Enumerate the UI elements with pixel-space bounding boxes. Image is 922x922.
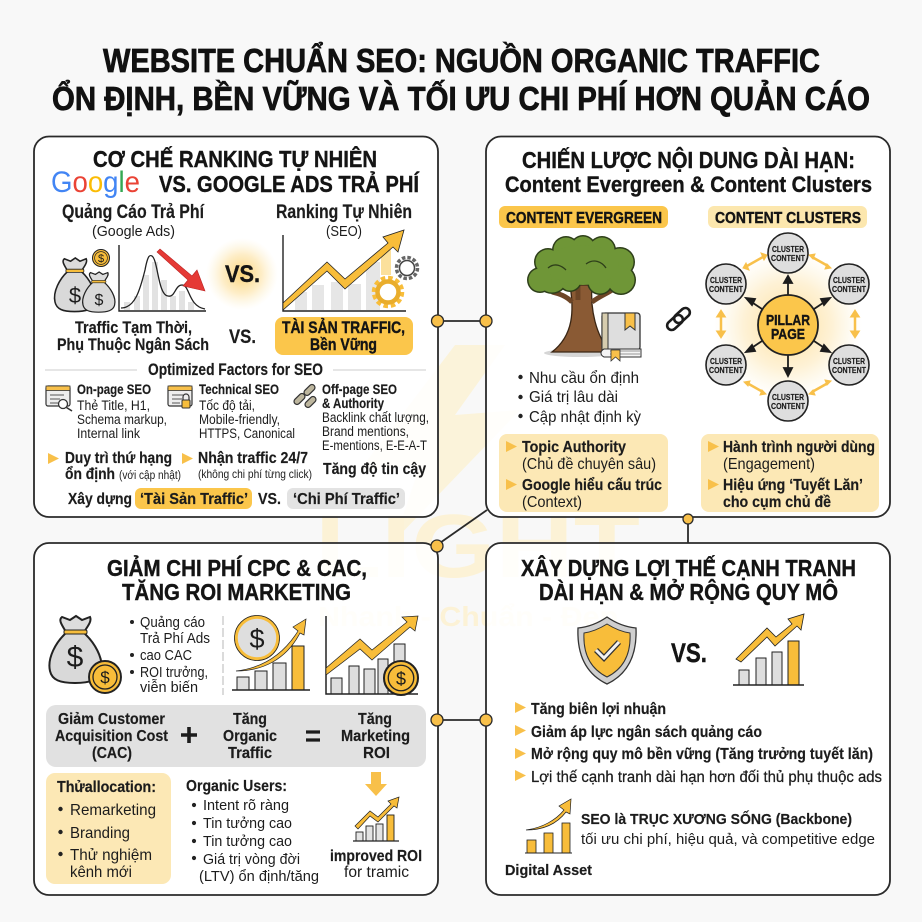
icon: shield <box>578 617 636 684</box>
callout: cluster benefits: Hiệu ứng ‘Tuyết Lăn’ <box>723 477 863 494</box>
organic label: (SEO) <box>326 223 362 240</box>
icon: on-page window <box>46 386 72 411</box>
paid ads label <box>62 202 205 240</box>
term: reduce CAC: Acquisition Cost <box>55 728 169 745</box>
subheading: optimized factors: Optimized Factors for SEO <box>148 361 323 379</box>
heading: DÀI HẠN & MỞ RỘNG QUY MÔ <box>539 577 838 605</box>
tag: content evergreen: CONTENT EVERGREEN <box>506 210 662 227</box>
cluster nodes: CONTENT <box>832 284 867 294</box>
organic label: Ranking Tự Nhiên <box>276 202 412 223</box>
list: evergreen traits <box>518 369 641 426</box>
benefit: stable ranking: Duy trì thứ hạng <box>65 450 172 467</box>
callout: evergreen benefits <box>499 434 668 512</box>
VS badge <box>206 238 278 310</box>
text: SEO backbone: tối ưu chi phí, hiệu quả, và competitive edge <box>581 831 875 848</box>
title <box>52 42 870 117</box>
cluster nodes <box>706 233 869 421</box>
heading: CƠ CHẾ RANKING TỰ NHIÊN <box>93 145 377 172</box>
callout: reallocation <box>46 773 171 884</box>
list: paid ads issues: cao CAC <box>140 648 192 664</box>
text: temporary traffic: Traffic Tạm Thời, <box>75 318 192 337</box>
term: marketing ROI <box>341 711 410 762</box>
term: organic traffic: Traffic <box>228 745 272 762</box>
heading <box>107 553 367 605</box>
heading <box>521 554 856 605</box>
term: reduce CAC: Giảm Customer <box>58 711 165 728</box>
callout: reallocation: Branding <box>70 825 130 842</box>
list: evergreen traits: Giá trị lâu dài <box>529 389 618 406</box>
watermark: LIGHT logo: LIGHT <box>315 497 640 597</box>
watermark: LIGHT logo: Nhanh - Chuẩn - Đẹp <box>318 601 618 632</box>
text: improved ROI: for tramic <box>344 864 409 881</box>
list: organic users: Intent rõ ràng <box>203 797 289 814</box>
heading: XÂY DỰNG LỢI THẾ CẠNH TRANH <box>521 554 856 581</box>
list: advantages: Giảm áp lực ngân sách quảng cáo <box>531 724 762 741</box>
term: reduce CAC: (CAC) <box>92 745 132 762</box>
text: technical SEO: Technical SEO <box>199 382 279 397</box>
heading: VS. GOOGLE ADS TRẢ PHÍ <box>159 169 420 197</box>
list: organic users: Tin tưởng cao <box>203 815 292 832</box>
connectors between panels <box>431 315 693 726</box>
summary row <box>68 488 405 509</box>
benefit: traffic 24/7: Nhận traffic 24/7 <box>198 450 308 467</box>
organic label <box>276 202 412 240</box>
callout: reallocation: kênh mới <box>70 864 132 881</box>
icon: money bags: $ <box>95 292 104 309</box>
text: technical SEO: Mobile-friendly, <box>199 412 280 427</box>
summary row: VS. <box>258 491 281 508</box>
text: technical SEO <box>199 382 295 441</box>
summary row: Xây dựng <box>68 491 132 508</box>
term: organic traffic: Tăng <box>233 711 267 728</box>
heading <box>93 145 420 197</box>
benefit: trust: Tăng độ tin cậy <box>323 461 426 478</box>
icon: money bag with coin: $ <box>67 641 84 674</box>
icon: money bags: $ <box>69 283 81 308</box>
tag: content evergreen <box>499 206 668 228</box>
text: on-page SEO: Thẻ Title, H1, <box>77 398 150 413</box>
text: on-page SEO <box>77 382 167 441</box>
list: advantages <box>515 701 882 786</box>
text: improved ROI <box>330 848 422 881</box>
cluster nodes: CLUSTER <box>772 244 804 254</box>
diagram: pillar and clusters <box>706 233 869 421</box>
pillar node: PILLAR <box>766 312 810 329</box>
benefit: stable ranking <box>48 450 181 483</box>
pillar node <box>758 295 818 355</box>
text: temporary traffic: Phụ Thuộc Ngân Sách <box>57 335 209 354</box>
list: paid ads issues: viễn biến <box>140 679 198 696</box>
VS badge: VS. <box>225 261 260 288</box>
term: marketing ROI: Tăng <box>358 711 392 728</box>
text: temporary traffic <box>57 318 209 354</box>
callout: evergreen benefits: (Context) <box>522 494 582 511</box>
panel: long-term competitive advantage <box>486 543 890 895</box>
list: advantages: Tăng biên lợi nhuận <box>531 701 666 718</box>
icon: money bag with coin <box>49 616 121 693</box>
term: reduce CAC <box>55 711 169 762</box>
cluster nodes: CLUSTER <box>833 275 865 285</box>
list: paid ads issues: ROI trưởng, <box>140 665 208 681</box>
panel: lower CPC and CAC <box>34 543 438 895</box>
paid ads label: Quảng Cáo Trả Phí <box>62 202 205 223</box>
callout: reallocation: Thửallocation: <box>57 779 156 796</box>
icon: money bags: $ <box>98 253 104 265</box>
cluster nodes: CONTENT <box>832 365 867 375</box>
icon: digital asset chart <box>525 799 572 853</box>
chart: coin growth bars: $ <box>249 624 265 654</box>
list: paid ads issues: Trả Phí Ads <box>140 631 210 647</box>
icon: technical window <box>168 386 192 408</box>
label: digital asset: Digital Asset <box>505 862 592 879</box>
list: evergreen traits: Cập nhật định kỳ <box>529 409 641 426</box>
heading: CHIẾN LƯỢC NỘI DUNG DÀI HẠN: <box>522 146 855 173</box>
VS label: VS. <box>229 327 256 348</box>
list: organic users: Tin tưởng cao <box>203 833 292 850</box>
callout: evergreen benefits: Google hiểu cấu trúc <box>522 476 662 494</box>
text: SEO backbone: SEO là TRỤC XƯƠNG SỐNG (Backbone) <box>581 810 852 828</box>
icon: chain links <box>293 383 317 409</box>
cluster nodes: CLUSTER <box>710 356 742 366</box>
chart: paid traffic decline <box>119 245 206 311</box>
VS label: VS. <box>671 638 707 668</box>
text: technical SEO: Tốc độ tải, <box>199 398 255 413</box>
heading <box>505 146 872 197</box>
equals sign <box>306 732 320 740</box>
list: organic users: Giá trị vòng đời <box>203 851 300 868</box>
title: WEBSITE CHUẨN SEO: NGUỒN ORGANIC TRAFFIC <box>103 42 820 79</box>
icon: gears <box>374 258 418 306</box>
cluster nodes: CONTENT <box>771 253 806 263</box>
text: off-page SEO: & Authority <box>322 396 384 411</box>
list: paid ads issues <box>130 615 210 696</box>
pillar node: PAGE <box>771 326 805 343</box>
list: organic users: (LTV) ổn định/tăng <box>199 868 319 885</box>
list: organic users <box>186 778 319 885</box>
icon: money bags <box>55 250 115 312</box>
text: off-page SEO: Brand mentions, <box>322 424 409 439</box>
icon: money bag with coin: $ <box>100 668 110 687</box>
benefit: stable ranking: (với cập nhật) <box>119 470 181 482</box>
text: technical SEO: HTTPS, Canonical <box>199 426 295 441</box>
callout: cluster benefits <box>701 434 879 512</box>
heading: TĂNG ROI MARKETING <box>122 578 351 605</box>
paid ads label: (Google Ads) <box>92 223 175 240</box>
cluster nodes: CLUSTER <box>710 275 742 285</box>
icon: mini ROI chart <box>353 797 399 841</box>
text: SEO backbone <box>581 810 875 848</box>
cluster nodes: CLUSTER <box>833 356 865 366</box>
text: improved ROI: improved ROI <box>330 848 422 865</box>
icon: tree <box>527 235 636 357</box>
text: off-page SEO <box>322 382 429 453</box>
chart: line and bars with coin: $ <box>396 669 406 689</box>
watermark: LIGHT logo <box>315 345 640 632</box>
tag: content clusters <box>708 206 867 228</box>
icon: chain link <box>665 306 692 332</box>
text: off-page SEO: Backlink chất lượng, <box>322 410 429 425</box>
callout: reallocation: Remarketing <box>70 802 156 819</box>
term: marketing ROI: ROI <box>363 745 390 762</box>
callout: traffic asset: Bền Vững <box>310 336 377 354</box>
panel: organic ranking vs Google Ads <box>34 136 438 517</box>
panel: long-term content strategy <box>486 136 890 517</box>
callout: traffic asset <box>275 317 413 355</box>
list: advantages: Mở rộng quy mô bền vững (Tăng trưởng tuyết lăn) <box>531 746 873 763</box>
text: off-page SEO: E-mentions, E-E-A-T <box>322 438 427 453</box>
callout: traffic asset: TÀI SẢN TRAFFIC, <box>282 318 405 337</box>
summary row: ‘Chi Phí Traffic’ <box>293 491 400 508</box>
term: marketing ROI: Marketing <box>341 728 410 745</box>
chart: coin growth bars <box>232 616 310 690</box>
tag: content clusters: CONTENT CLUSTERS <box>715 210 861 227</box>
callout: reallocation: Thử nghiệm <box>70 847 152 864</box>
list: organic users: Organic Users: <box>186 778 287 795</box>
term: organic traffic <box>223 711 277 762</box>
text: on-page SEO: Schema markup, <box>77 412 167 427</box>
heading: Content Evergreen & Content Clusters <box>505 172 872 197</box>
benefit: traffic 24/7 <box>182 450 312 481</box>
cluster nodes: CONTENT <box>709 284 744 294</box>
spokes <box>746 276 830 376</box>
icon: Google logo: Google <box>51 166 140 199</box>
benefit: traffic 24/7: (không chi phí từng click) <box>198 467 312 481</box>
callout: evergreen benefits: Topic Authority <box>522 439 626 456</box>
text: on-page SEO: On-page SEO <box>77 382 151 397</box>
callout: evergreen benefits: (Chủ đề chuyên sâu) <box>522 456 656 473</box>
cluster nodes: CLUSTER <box>772 392 804 402</box>
formula band <box>46 705 426 767</box>
chart: growth bars <box>733 614 804 685</box>
double arrows between clusters <box>716 253 860 395</box>
summary row: ‘Tài Sản Traffic’ <box>140 491 248 508</box>
list: paid ads issues: Quảng cáo <box>140 615 205 631</box>
cluster nodes: CONTENT <box>771 401 806 411</box>
chart: line and bars with coin <box>326 616 418 695</box>
plus sign <box>181 727 197 743</box>
benefit: stable ranking: ổn định <box>65 465 115 483</box>
chart: organic growth <box>283 230 406 311</box>
cluster nodes: CONTENT <box>709 365 744 375</box>
term: organic traffic: Organic <box>223 728 277 745</box>
arrow: down to improved ROI <box>365 772 387 796</box>
callout: cluster benefits: (Engagement) <box>723 456 815 473</box>
text: on-page SEO: Internal link <box>77 426 140 441</box>
heading: GIẢM CHI PHÍ CPC & CAC, <box>107 553 367 581</box>
list: evergreen traits: Nhu cầu ổn định <box>529 369 639 387</box>
list: advantages: Lợi thế cạnh tranh dài hạn hơn đối thủ phụ thuộc ads <box>531 769 882 786</box>
icon: book <box>601 313 641 361</box>
callout: cluster benefits: cho cụm chủ đề <box>723 494 831 511</box>
text: off-page SEO: Off-page SEO <box>322 382 397 397</box>
callout: cluster benefits: Hành trình người dùng <box>723 439 875 456</box>
